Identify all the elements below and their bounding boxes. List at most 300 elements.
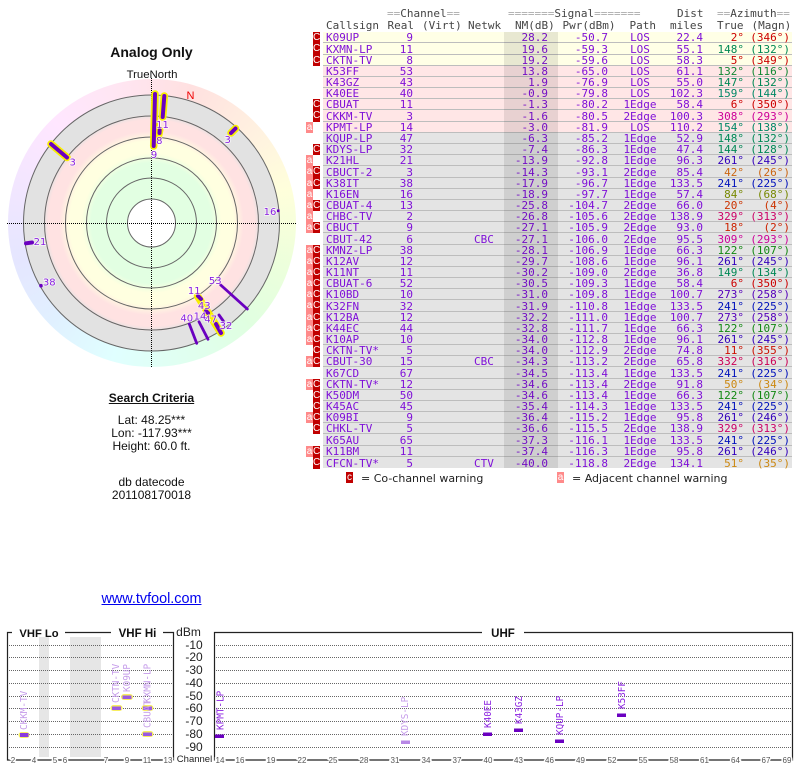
row: CKTN-TV* channel 5: CKTN-TV* <box>326 344 379 357</box>
row: K44EC: (107°) <box>750 322 790 335</box>
station channel labels: 9 <box>151 150 157 161</box>
row: CKTN-TV* channel 5: 2Edge <box>623 344 657 357</box>
row: K11NT <box>323 267 792 278</box>
row: K44EC: 66.3 <box>676 322 703 335</box>
row: KXMN-LP: (132°) <box>750 43 790 56</box>
row: CKKM-TV: (293°) <box>750 110 790 123</box>
row: KPMT-LP: 14 <box>400 121 413 134</box>
row: K50DM: -34.6 <box>515 389 548 402</box>
row: K40EE <box>323 88 792 99</box>
row: CBUCT: -27.1 <box>515 221 548 234</box>
row: CHBC-TV: CHBC-TV <box>326 210 372 223</box>
row: K43GZ: (132°) <box>750 76 790 89</box>
row: KPMT-LP: (138°) <box>750 121 790 134</box>
dBm axis labels: Channel <box>177 754 212 765</box>
row: K45AC <box>323 401 792 412</box>
row: CBUT-30: 2Edge <box>623 355 657 368</box>
row: CBUAT-6: -30.5 <box>515 277 548 290</box>
row: CHKL-TV: 138.9 <box>670 422 703 435</box>
row: CBUT-30: 15 <box>400 355 413 368</box>
row: K16EN <box>323 189 792 200</box>
station table: C <box>313 446 320 457</box>
row: CBUCT: CBUCT <box>326 221 359 234</box>
UHF panel <box>214 628 792 765</box>
row: CBUAT: 58.4 <box>676 98 703 111</box>
row: CBUAT: -80.2 <box>575 98 608 111</box>
VHF panel: 13 <box>164 756 173 765</box>
station table: C <box>313 278 320 289</box>
row: CBUT-42: -27.1 <box>515 233 548 246</box>
row: KXMN-LP: 55.1 <box>676 43 703 56</box>
row: CBUCT-2: 3 <box>406 166 413 179</box>
row: CBUAT-4: (4°) <box>764 199 790 212</box>
station table: C <box>313 144 320 155</box>
row: CKTN-TV <box>323 55 792 66</box>
row: CBUT-30: (316°) <box>750 355 790 368</box>
row: CBUT-42: 309° <box>718 233 744 246</box>
legend: adjacent channel warning: a <box>558 472 563 483</box>
VHF station: K09UP: K09UP <box>122 664 133 692</box>
row: CBUAT <box>323 99 792 110</box>
station table: a <box>307 412 312 423</box>
row: KPMT-LP: KPMT-LP <box>326 121 372 134</box>
row: K40EE: -79.8 <box>575 87 608 100</box>
row: CHBC-TV <box>323 211 792 222</box>
row: K38IT: 1Edge <box>623 177 657 190</box>
row: KQUP-LP: 47 <box>400 132 413 145</box>
row: KMNZ-LP: 122° <box>718 244 744 257</box>
row: K67CD: 1Edge <box>623 367 657 380</box>
UHF station: K40EE: K40EE <box>483 700 494 728</box>
row: CBUT-30 <box>323 356 792 367</box>
row: CFCN-TV*: -118.8 <box>568 457 608 470</box>
row: CHBC-TV: 138.9 <box>670 210 703 223</box>
row: KXMN-LP: -59.3 <box>575 43 608 56</box>
station channel labels: 47 <box>204 314 217 326</box>
row: CBUCT: -105.9 <box>568 221 608 234</box>
UHF station: KQUP-LP: KQUP-LP <box>555 695 566 735</box>
row: K21HL: K21HL <box>326 154 359 167</box>
row: KMNZ-LP: KMNZ-LP <box>326 244 372 257</box>
row: K38IT: 133.5 <box>670 177 703 190</box>
row: K11BM: -116.3 <box>568 445 608 458</box>
row: K43GZ: 1.9 <box>528 76 548 89</box>
dBm axis labels: -30 <box>185 663 203 677</box>
UHF panel: 22 <box>298 756 307 765</box>
row: K12AV: 261° <box>718 255 744 268</box>
spectrum chart <box>6 625 794 765</box>
row: K09BI: (246°) <box>750 411 790 424</box>
row: KQUP-LP: 148° <box>718 132 744 145</box>
row: K50DM: (107°) <box>750 389 790 402</box>
station table: a <box>307 166 312 177</box>
station table: C <box>313 401 320 412</box>
row: K10AP: -34.0 <box>515 333 548 346</box>
station table: C <box>313 334 320 345</box>
row: CHBC-TV: -26.8 <box>515 210 548 223</box>
row: CHBC-TV: 2 <box>406 210 413 223</box>
database datecode: 201108170018 <box>112 488 191 502</box>
row: K12BA: 12 <box>400 311 413 324</box>
row: K40EE: (144°) <box>750 87 790 100</box>
row: K10AP <box>323 334 792 345</box>
station table: a <box>307 155 312 166</box>
row: CBUCT-2 <box>323 166 792 178</box>
station table: a <box>307 356 312 367</box>
row: K11BM: -37.4 <box>515 445 548 458</box>
dBm axis labels <box>176 625 212 765</box>
row: K32FN: (225°) <box>750 300 790 313</box>
row: CHKL-TV: (313°) <box>750 422 790 435</box>
row: CBUT-42: (293°) <box>750 233 790 246</box>
row: K43GZ: 43 <box>400 76 413 89</box>
row: KDYS-LP: 32 <box>400 143 413 156</box>
row: CBUAT-4: CBUAT-4 <box>326 199 372 212</box>
row: K10AP: 10 <box>400 333 413 346</box>
row: K12AV: 1Edge <box>623 255 657 268</box>
row: CBUT-30: CBUT-30 <box>326 355 372 368</box>
VHF panel <box>8 628 174 765</box>
row: K10AP: -112.8 <box>568 333 608 346</box>
row: CHBC-TV: 329° <box>718 210 744 223</box>
row: CBUAT-6: -109.3 <box>568 277 608 290</box>
UHF panel: 55 <box>639 756 648 765</box>
row: KQUP-LP: 52.9 <box>676 132 703 145</box>
station channel labels: 16 <box>264 207 276 218</box>
row: CBUT-42 <box>323 233 792 245</box>
row: CBUT-42: 6 <box>406 233 413 246</box>
dBm axis labels: -50 <box>185 689 203 703</box>
station table: a <box>307 122 312 133</box>
row: K11NT: 2Edge <box>623 266 657 279</box>
VHF panel: 6 <box>63 756 68 765</box>
row: K44EC: 1Edge <box>623 322 657 335</box>
row: K32FN: -31.9 <box>515 300 548 313</box>
table header: True <box>717 19 744 32</box>
row: CBUT-30: -113.2 <box>568 355 608 368</box>
row: CKTN-TV* channel 5: -112.9 <box>568 344 608 357</box>
VHF station: CKKM-TV: CKKM-TV <box>19 690 30 730</box>
row: K45AC: (225°) <box>750 400 790 413</box>
row: CBUT-42: 2Edge <box>623 233 657 246</box>
row: CHBC-TV: (313°) <box>750 210 790 223</box>
station channel labels: 40 <box>180 314 193 324</box>
row: K32FN: -110.8 <box>568 300 608 313</box>
row: K11BM: K11BM <box>326 445 359 458</box>
UHF station: KPMT-LP: KPMT-LP <box>216 690 226 730</box>
row: CKKM-TV: 2Edge <box>623 110 657 123</box>
row: KXMN-LP: LOS <box>630 43 650 56</box>
UHF station: K53FF: K53FF <box>617 681 628 709</box>
row: K45AC: -114.3 <box>568 400 608 413</box>
UHF panel: 67 <box>762 756 771 765</box>
row: K11NT: 149° <box>718 266 744 279</box>
row: CBUT-30: -34.3 <box>515 355 548 368</box>
table header: miles <box>670 19 703 32</box>
row: K12BA: (258°) <box>750 311 790 324</box>
row: CBUAT-6: (350°) <box>750 277 790 290</box>
row: K65AU: 65 <box>400 434 413 447</box>
row: K67CD: K67CD <box>326 367 359 380</box>
station table: C <box>313 32 320 43</box>
UHF panel: 61 <box>700 756 709 765</box>
row: CBUCT <box>323 222 792 233</box>
search location details: Height: 60.0 ft. <box>112 439 191 453</box>
row: K40EE: -0.9 <box>522 87 548 100</box>
row: K10BD: 100.7 <box>670 288 703 301</box>
station table: C <box>313 43 320 54</box>
row: CBUCT: 2Edge <box>623 221 657 234</box>
UHF panel: 52 <box>608 756 617 765</box>
row: K12AV: K12AV <box>326 255 359 268</box>
row: K12BA: 100.7 <box>670 311 703 324</box>
row: CKTN-TV* channel 12: 91.8 <box>676 378 703 391</box>
row: K10BD: -109.8 <box>568 288 608 301</box>
row: CFCN-TV*: 2Edge <box>623 457 657 470</box>
row: KQUP-LP <box>323 133 792 144</box>
row: CBUAT-4: 66.0 <box>676 199 703 212</box>
row: CBUCT: (2°) <box>764 221 790 234</box>
UHF panel: 40 <box>484 756 493 765</box>
UHF panel: 46 <box>545 756 554 765</box>
row: CHBC-TV: 2Edge <box>623 210 657 223</box>
row: K40EE: 40 <box>400 87 413 100</box>
station table: C <box>313 379 320 390</box>
row: CBUCT-2: 85.4 <box>676 166 703 179</box>
row: CFCN-TV*: 134.1 <box>670 457 703 470</box>
row: K45AC: K45AC <box>326 400 359 413</box>
row: CBUT-30: 65.8 <box>676 355 703 368</box>
row: KMNZ-LP: 66.3 <box>676 244 703 257</box>
row: K32FN: K32FN <box>326 300 359 313</box>
row: K12BA: -32.2 <box>515 311 548 324</box>
row: K38IT: (225°) <box>750 177 790 190</box>
row: K67CD: 241° <box>718 367 744 380</box>
row: K38IT: -96.7 <box>575 177 608 190</box>
row: K11BM: 1Edge <box>623 445 657 458</box>
row: K65AU: 133.5 <box>670 434 703 447</box>
station table: C <box>313 256 320 267</box>
station channel labels: 32 <box>220 321 232 332</box>
row: CBUCT: 9 <box>406 221 413 234</box>
UHF panel: 49 <box>576 756 585 765</box>
station table: C <box>313 323 320 334</box>
row: K09UP: (346°) <box>750 31 790 44</box>
table header: Dist <box>677 7 704 20</box>
dBm axis labels: -40 <box>185 676 203 690</box>
station table: a <box>307 278 312 289</box>
row: K09UP: 2° <box>731 31 744 44</box>
link: tvfool: www.tvfool.com <box>102 591 201 607</box>
row: K16EN: K16EN <box>326 188 359 201</box>
search location details <box>111 413 192 453</box>
row: KDYS-LP: (128°) <box>750 143 790 156</box>
row: CBUAT-6: 1Edge <box>623 277 657 290</box>
station channel labels: 43 <box>198 301 211 312</box>
row: K40EE: 102.3 <box>670 87 703 100</box>
row: CBUCT-2: 42° <box>724 166 744 179</box>
row: CBUCT: 18° <box>724 221 744 234</box>
station table: a <box>307 312 312 323</box>
row: KDYS-LP: 1Edge <box>623 143 657 156</box>
row: K11NT: 11 <box>400 266 413 279</box>
row: K44EC: -111.7 <box>568 322 608 335</box>
table header: Pwr(dBm) <box>562 19 615 32</box>
row: KQUP-LP: (132°) <box>750 132 790 145</box>
row: CFCN-TV*: (35°) <box>757 457 790 470</box>
row: KMNZ-LP: (107°) <box>750 244 790 257</box>
row: K40EE: K40EE <box>326 87 359 100</box>
station table: C <box>313 166 320 177</box>
row: K44EC: K44EC <box>326 322 359 335</box>
station channel labels: 8 <box>156 136 162 147</box>
station table: a <box>307 334 312 345</box>
row: CKTN-TV* channel 12: 50° <box>724 378 744 391</box>
row: CKKM-TV: CKKM-TV <box>326 110 372 123</box>
row: CKTN-TV: (349°) <box>750 54 790 67</box>
row: K09BI: 1Edge <box>623 411 657 424</box>
row: CKTN-TV* channel 12: (34°) <box>757 378 790 391</box>
row: CFCN-TV*: CTV <box>474 457 494 470</box>
VHF panel: VHF Lo <box>19 628 59 640</box>
row: K21HL: -92.8 <box>575 154 608 167</box>
row: K12AV: -108.6 <box>568 255 608 268</box>
station table: C <box>313 423 320 434</box>
row: K50DM: -113.4 <box>568 389 608 402</box>
row: K38IT: -17.9 <box>515 177 548 190</box>
VHF panel: 9 <box>125 756 130 765</box>
station table: C <box>313 300 320 311</box>
row: KQUP-LP: KQUP-LP <box>326 132 372 145</box>
row: K11BM: 11 <box>400 445 413 458</box>
row: K12AV <box>323 256 792 267</box>
row: CBUAT: -1.3 <box>522 98 548 111</box>
row: KQUP-LP: -85.2 <box>575 132 608 145</box>
title: Analog Only: Analog Only <box>110 44 193 60</box>
row: K11BM: (246°) <box>750 445 790 458</box>
row: K10BD: (258°) <box>750 288 790 301</box>
row: K65AU: (225°) <box>750 434 790 447</box>
row: CBUT-30: CBC <box>474 355 494 368</box>
row: CBUAT-4: 13 <box>400 199 413 212</box>
row: K10AP: K10AP <box>326 333 359 346</box>
row: K10BD: 1Edge <box>623 288 657 301</box>
UHF panel: 25 <box>329 756 338 765</box>
VHF panel: 11 <box>143 756 152 765</box>
station table: C <box>313 312 320 323</box>
station table: C <box>313 55 320 66</box>
VHF panel: 5 <box>53 756 58 765</box>
table header: Real <box>388 19 414 32</box>
rainbow azimuth ring <box>8 79 296 367</box>
station table: a <box>307 256 312 267</box>
row: KXMN-LP: 19.6 <box>522 43 548 56</box>
row: CKKM-TV <box>323 110 792 122</box>
row: KDYS-LP: 47.4 <box>676 143 703 156</box>
row: K53FF: 53 <box>400 65 413 78</box>
row: KQUP-LP: 1Edge <box>623 132 657 145</box>
station table: a <box>307 178 312 189</box>
station channel labels: 14 <box>194 312 206 322</box>
row: K44EC <box>323 323 792 334</box>
row: K65AU: -37.3 <box>515 434 548 447</box>
UHF panel: 58 <box>670 756 679 765</box>
row: K53FF <box>323 66 792 77</box>
row: K10BD: 273° <box>718 288 744 301</box>
UHF panel: 28 <box>360 756 369 765</box>
row: K12AV: 96.1 <box>676 255 703 268</box>
polar overlay <box>7 69 296 367</box>
row: CBUAT-6: 52 <box>400 277 413 290</box>
station channel labels: 3 <box>70 158 76 168</box>
row: K45AC: 45 <box>400 400 413 413</box>
UHF panel: 34 <box>422 756 431 765</box>
row: K53FF: K53FF <box>326 65 359 78</box>
row: K45AC: 1Edge <box>623 400 657 413</box>
row: CBUAT-4: 2Edge <box>623 199 657 212</box>
row: CHKL-TV: CHKL-TV <box>326 422 372 435</box>
row: CKTN-TV: CKTN-TV <box>326 54 372 67</box>
row: CKKM-TV: -80.5 <box>575 110 608 123</box>
row: CHKL-TV: 5 <box>406 422 413 435</box>
row: K44EC: -32.8 <box>515 322 548 335</box>
row: K40EE: 159° <box>718 87 744 100</box>
VHF panel: VHF Hi <box>119 628 156 640</box>
row: K38IT: 38 <box>400 177 413 190</box>
row: CBUAT-4: 20° <box>724 199 744 212</box>
row: CKKM-TV: -1.6 <box>522 110 548 123</box>
row: K21HL: 1Edge <box>623 154 657 167</box>
station channel labels: 38 <box>43 278 56 288</box>
row: CKTN-TV* channel 12: -34.6 <box>515 378 548 391</box>
row: K53FF: 61.1 <box>676 65 703 78</box>
database datecode: db datecode <box>118 475 185 489</box>
row: K45AC: 133.5 <box>670 400 703 413</box>
table header: Callsign <box>326 19 379 32</box>
station channel labels: 3 <box>225 135 231 146</box>
row: CKKM-TV: 100.3 <box>670 110 703 123</box>
row: CBUAT-4 <box>323 200 792 211</box>
row: CHKL-TV: 2Edge <box>623 422 657 435</box>
row: KPMT-LP: 110.2 <box>670 121 703 134</box>
station table: C <box>313 200 320 211</box>
row: K32FN: 1Edge <box>623 300 657 313</box>
row: K10BD: -31.0 <box>515 288 548 301</box>
row: K44EC: 122° <box>718 322 744 335</box>
row: CBUAT-4: -25.8 <box>515 199 548 212</box>
row: K43GZ: LOS <box>630 76 650 89</box>
label: TrueNorth: TrueNorth <box>127 69 177 81</box>
station table: a <box>307 222 312 233</box>
row: KXMN-LP: KXMN-LP <box>326 43 372 56</box>
row: CKTN-TV* channel 12: 2Edge <box>623 378 657 391</box>
row: KXMN-LP: 148° <box>718 43 744 56</box>
row: CKTN-TV* channel 12 <box>323 379 792 390</box>
row: CHBC-TV: -105.6 <box>568 210 608 223</box>
row: K43GZ: K43GZ <box>326 76 359 89</box>
row: K11BM <box>323 446 792 457</box>
row: KMNZ-LP: -106.9 <box>568 244 608 257</box>
VHF station: KXMN-LP: KXMN-LP <box>142 663 154 703</box>
row: K67CD: 67 <box>400 367 413 380</box>
row: K11BM: 261° <box>718 445 744 458</box>
station table: a <box>307 379 312 390</box>
row: K53FF: 132° <box>718 65 744 78</box>
row: CBUT-42: -106.0 <box>568 233 608 246</box>
row: K38IT: 241° <box>718 177 744 190</box>
UHF panel: UHF <box>491 628 515 640</box>
row: K53FF: -65.0 <box>575 65 608 78</box>
